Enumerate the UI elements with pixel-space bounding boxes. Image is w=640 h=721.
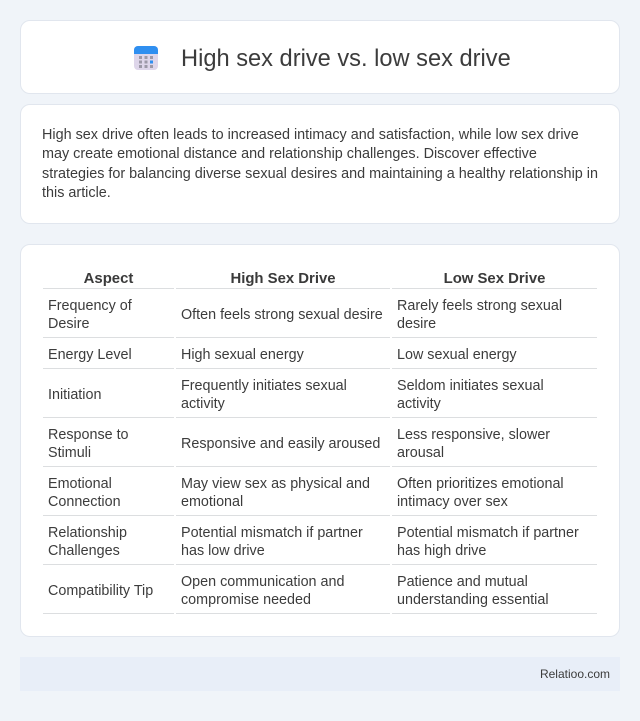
comparison table: Aspect [84,271,133,287]
comparison table: Less responsive, slower [397,427,550,443]
intro text [42,127,598,201]
comparison table: compromise needed [181,592,311,608]
comparison table: Open communication and [181,574,344,590]
comparison table: activity [181,396,225,412]
footer [20,657,620,691]
comparison table: Rarely feels strong sexual [397,298,562,314]
comparison table: Emotional [48,476,112,492]
comparison table: High sexual energy [181,347,304,363]
intro text: this article. [42,185,111,201]
comparison table: Often feels strong sexual desire [181,307,383,323]
comparison table: intimacy over sex [397,494,508,510]
intro text: strategies for balancing diverse sexual desires and maintaining a healthy relationship in [42,166,598,182]
comparison table: Challenges [48,543,120,559]
comparison table: Frequency of [48,298,132,314]
comparison table: activity [397,396,441,412]
comparison table: Low Sex Drive [444,271,545,287]
comparison table: Response to [48,427,129,443]
comparison table: Compatibility Tip [48,583,153,599]
comparison table: Patience and mutual [397,574,528,590]
comparison table: understanding essential [397,592,549,608]
comparison table: Low sexual energy [397,347,517,363]
comparison table: has low drive [181,543,265,559]
intro panel [20,104,620,224]
intro text: may create emotional distance and relationship challenges. Discover effective [42,146,537,162]
title: High sex drive vs. low sex drive [181,46,511,72]
title card [20,20,620,94]
icon: calendar [134,46,158,70]
comparison table [43,271,597,614]
comparison table: Potential mismatch if partner [181,525,363,541]
comparison table: Seldom initiates sexual [397,378,544,394]
comparison table: Energy Level [48,347,132,363]
intro text: High sex drive often leads to increased intimacy and satisfaction, while low sex drive [42,127,579,143]
comparison table: arousal [397,445,444,461]
comparison table: emotional [181,494,243,510]
comparison table: Initiation [48,387,101,403]
comparison table: May view sex as physical and [181,476,370,492]
comparison table: desire [397,316,436,332]
table panel [20,244,620,637]
comparison table: Responsive and easily aroused [181,436,380,452]
comparison table: Desire [48,316,89,332]
comparison table: has high drive [397,543,486,559]
comparison table: Potential mismatch if partner [397,525,579,541]
comparison table: High Sex Drive [230,271,336,287]
comparison table: Frequently initiates sexual [181,378,347,394]
comparison table: Connection [48,494,121,510]
footer brand: Relatioo.com [540,667,610,681]
comparison table: Stimuli [48,445,91,461]
comparison table: Relationship [48,525,127,541]
comparison table: Often prioritizes emotional [397,476,564,492]
